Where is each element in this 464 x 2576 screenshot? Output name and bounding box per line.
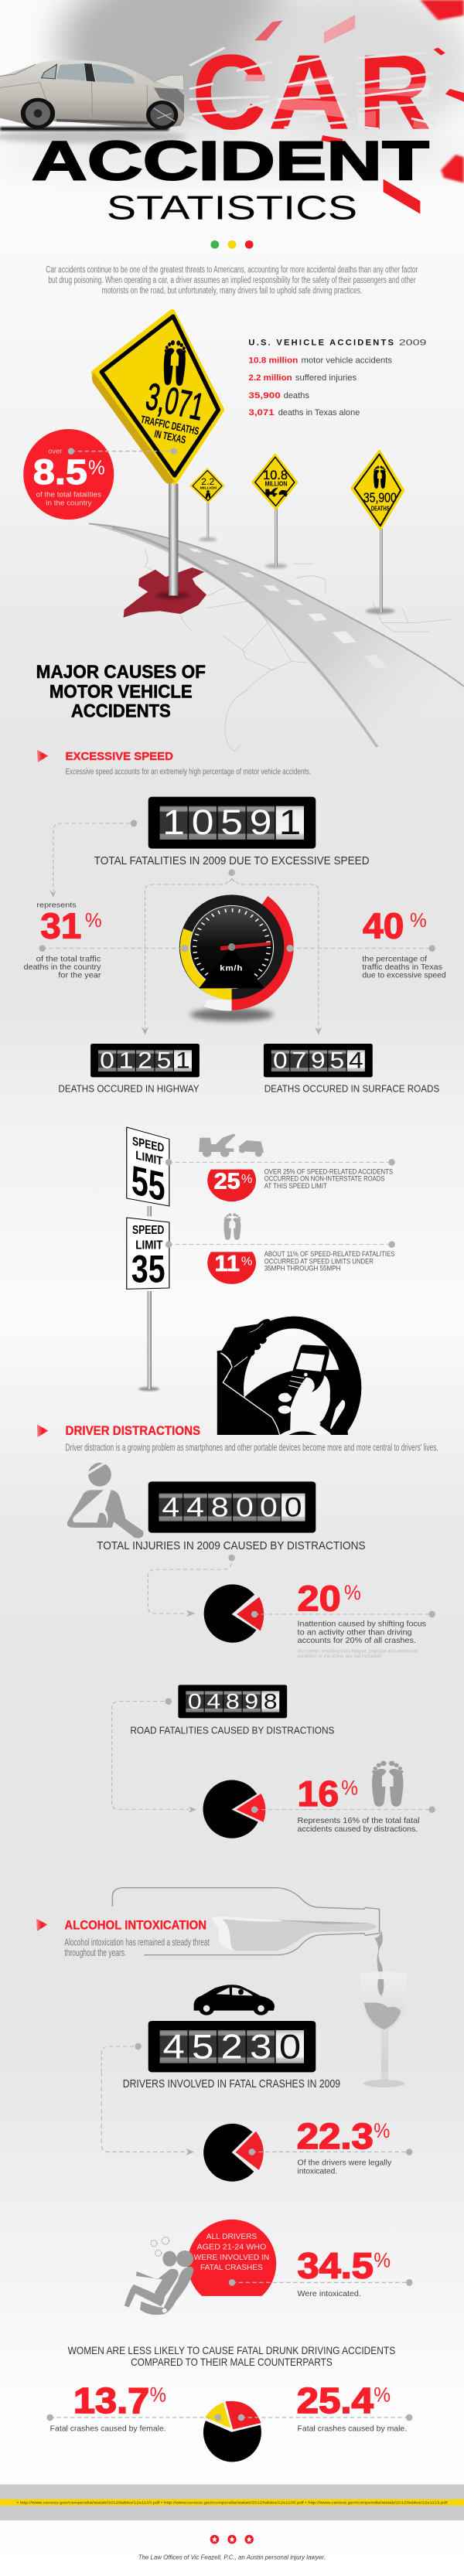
small sign: 35,900 deaths: 35,900: [363, 489, 397, 505]
counter: 10591: [148, 797, 316, 849]
U.S. vehicle accidents stats: [248, 339, 426, 417]
speed limit signs on a pole: SPEED: [132, 1224, 164, 1237]
small sign: 2.2 million: [191, 469, 223, 541]
sources band: [0, 2484, 464, 2520]
small sign: 10.8 million: MILLION: [264, 479, 288, 487]
U.S. vehicle accidents stats: U.S. VEHICLE ACCIDENTS: [248, 339, 394, 348]
counter: 07954: 0: [273, 1047, 288, 1073]
speed limit signs on a pole: 55: [131, 1157, 165, 1211]
U.S. vehicle accidents stats: 3,071: [248, 408, 275, 417]
header background haze: [0, 0, 464, 170]
counter: 10591: 1: [279, 803, 301, 842]
counter: 07954: 4: [349, 1047, 363, 1073]
counter: 45230: 0: [279, 2029, 301, 2067]
traffic light dots: [210, 240, 254, 249]
pole shadow on Texas: [157, 592, 189, 599]
icon: section arrow: [36, 1919, 47, 1931]
speed limit signs on a pole: LIMIT: [135, 1239, 162, 1252]
16 percent stat: Represents 16% of the total fatal: [298, 1817, 420, 1825]
34.5 percent stat: 34.5: [298, 2246, 374, 2286]
heading: women versus men: [68, 2345, 395, 2368]
13.7 percent stat: %: [150, 2384, 166, 2407]
20 percent stat: to an activity other than driving: [298, 1628, 412, 1637]
heading: alcohol intoxication: ALCOHOL INTOXICATION: [64, 1917, 206, 1932]
counter: 45230: 2: [220, 2029, 243, 2067]
small sign: 2.2 million: MILLION: [200, 486, 217, 490]
icon: feet: [223, 1213, 241, 1240]
25.4 percent stat: 25.4: [297, 2380, 374, 2421]
counter label: TOTAL FATALITIES IN 2009 DUE TO EXCESSIVE SPEED: [94, 855, 370, 867]
40 percent stat: 40: [363, 906, 404, 946]
icon: pouring stream: [374, 1930, 383, 1996]
alcohol description: throughout the years.: [64, 1947, 126, 1958]
25.4 percent stat: Fatal crashes caused by male.: [298, 2424, 407, 2434]
speed limit signs on a pole: SPEED: [132, 1134, 164, 1155]
heading: excessive speed: EXCESSIVE SPEED: [66, 751, 173, 763]
counter: 01251: 5: [157, 1047, 171, 1073]
pie chart: gender comparison: [203, 2401, 261, 2462]
counter: 01251: 0: [100, 1047, 114, 1073]
pie chart: 16 percent: [203, 1780, 265, 1838]
counter: 04898: 0: [188, 1690, 202, 1713]
11 percent badge: [207, 1251, 256, 1284]
small sign: 10.8 million: 10.8: [263, 468, 288, 482]
icon: injured person: [67, 1462, 144, 1538]
star badges: [210, 2535, 254, 2544]
counter: 10591: 9: [250, 803, 271, 842]
counter: 448000: 4: [162, 1492, 179, 1523]
final statistics section: [0, 2072, 464, 2561]
counter: 01251: 1: [119, 1047, 133, 1073]
22.3 percent stat: [297, 2116, 391, 2176]
counter: 07954: [264, 1044, 373, 1077]
11 percent text: 35MPH THROUGH 55MPH: [264, 1265, 340, 1273]
25 percent text: [264, 1168, 393, 1191]
sign text: [138, 376, 208, 448]
bubble: drivers aged 21-24: WERE INVOLVED IN: [194, 2254, 269, 2262]
icon: car silhouette: [194, 1985, 275, 2015]
counter: 07954: 9: [311, 1047, 326, 1073]
22.3 percent stat: 22.3: [297, 2116, 374, 2156]
callout: 8.5 percent circle: %: [88, 456, 105, 479]
U.S. vehicle accidents stats: deaths in Texas alone: [278, 408, 360, 417]
flying shards: [254, 0, 464, 214]
22.3 percent stat: intoxicated.: [298, 2167, 337, 2176]
icon: wine glass: [360, 1971, 407, 2073]
25 percent text: OVER 25% OF SPEED-RELATED ACCIDENTS: [264, 1168, 393, 1176]
title: CAR (shattered): C: [192, 33, 266, 152]
31 percent stat: %: [85, 909, 102, 932]
connector to 16 percent pie, upper part: [112, 1698, 172, 1748]
callout: 8.5 percent circle: in the country: [46, 499, 92, 508]
counter: 10591: 5: [220, 803, 243, 842]
icon: toe tag feet: [162, 340, 186, 386]
25 percent text: AT THIS SPEED LIMIT: [264, 1183, 327, 1191]
31 percent stat: for the year: [58, 972, 101, 980]
31 percent stat: deaths in the country: [24, 964, 101, 972]
speedometer gauge: km/h: [220, 964, 242, 973]
11 percent badge: %: [241, 1254, 252, 1268]
counter label: DRIVERS INVOLVED IN FATAL CRASHES IN 2009: [123, 2077, 340, 2090]
bubble: drivers aged 21-24: [187, 2220, 276, 2296]
title: CAR (shattered): A: [268, 33, 350, 152]
heading: major causes: MAJOR CAUSES OF: [36, 662, 206, 683]
counter: 45230: 5: [192, 2029, 213, 2067]
16 percent stat: accidents caused by distractions.: [298, 1825, 418, 1834]
40 percent stat: due to excessive speed: [362, 972, 446, 980]
excessive speed section: [24, 797, 446, 1095]
connector to 22.3 percent pie, upper part: [101, 2043, 142, 2073]
40 percent stat: traffic deaths in Texas: [362, 964, 442, 972]
22.3 percent stat: %: [374, 2120, 390, 2142]
title: CAR (shattered): [189, 33, 435, 152]
counter: 01251: 1: [176, 1047, 190, 1073]
counter: 01251: [90, 1044, 200, 1077]
intro text: [46, 264, 418, 295]
31 percent stat: of the total traffic: [36, 956, 101, 963]
counter: 448000: 8: [211, 1492, 229, 1523]
connector 22.3 percent: [248, 2148, 412, 2155]
counter: 448000: 0: [285, 1492, 302, 1523]
22.3 percent stat: Of the drivers were legally: [298, 2159, 391, 2168]
callout: 8.5 percent circle: of the total fatalities: [36, 491, 101, 499]
13.7 percent stat: 13.7: [73, 2380, 149, 2421]
counter label: TOTAL INJURIES IN 2009 CAUSED BY DISTRACTIONS: [97, 1540, 366, 1552]
connector 20 percent: [251, 1611, 435, 1617]
11 percent text: ABOUT 11% OF SPEED-RELATED FATALITIES: [264, 1251, 394, 1259]
counter: 448000: [148, 1481, 316, 1533]
sign text: 3,071: [142, 376, 207, 428]
small sign: 35,900 deaths: [352, 451, 404, 614]
U.S. vehicle accidents stats: 2.2 million: [248, 373, 292, 383]
excessive speed description: Excessive speed accounts for an extremely high percentage of motor vehicle accidents.: [66, 768, 311, 777]
20 percent stat: condition of the driver are not included): [298, 1654, 382, 1659]
counter: 448000: 0: [260, 1492, 278, 1523]
connector 55: [165, 1159, 395, 1166]
callout: 8.5 percent circle: 8.5: [33, 452, 87, 492]
connector to pie: [148, 1555, 235, 1617]
16 percent stat: [298, 1774, 420, 1834]
connector 35: [165, 1241, 395, 1248]
11 percent badge: 11: [214, 1251, 240, 1276]
counter label: ROAD FATALITIES CAUSED BY DISTRACTIONS: [130, 1725, 334, 1736]
sign text: IN TEXAS: [153, 428, 187, 446]
counter: 45230: [148, 2021, 316, 2072]
heading: major causes: ACCIDENTS: [71, 700, 171, 721]
25.4 percent stat: %: [374, 2384, 391, 2407]
31 percent stat: 31: [40, 906, 81, 946]
connector gender: [46, 2414, 412, 2421]
icon: feet: [372, 1761, 403, 1807]
callout: 8.5 percent circle: [23, 429, 114, 520]
heading: major causes: [36, 662, 206, 721]
label: highway: DEATHS OCCURED IN HIGHWAY: [58, 1084, 200, 1095]
alcohol section: [36, 1747, 435, 2073]
speed limit section: [125, 1125, 395, 1391]
small sign: 10.8 million: [253, 455, 297, 568]
20 percent stat: [298, 1579, 426, 1659]
20 percent stat: (Accidents resulting from fatigue, physical and emotional: [298, 1649, 418, 1654]
big Texas sign: [92, 312, 221, 595]
connector to 31 percent: [49, 820, 137, 898]
25 percent badge: 25: [214, 1168, 241, 1194]
counter: 04898: 4: [206, 1690, 220, 1713]
title: STATISTICS: STATISTICS: [107, 188, 357, 227]
alcohol description: [64, 1937, 210, 1958]
title: ACCIDENT: ACCIDENT: [32, 130, 429, 192]
sign text: TRAFFIC DEATHS: [140, 414, 200, 437]
Texas map highlight: [124, 567, 206, 618]
bubble: drivers aged 21-24: AGED 21-24 WHO: [196, 2243, 267, 2252]
counter: 07954: 5: [329, 1047, 344, 1073]
20 percent stat: 20: [298, 1579, 341, 1619]
counter: 448000: 0: [236, 1492, 254, 1523]
counter: 04898: 8: [264, 1690, 278, 1713]
heading: major causes: MOTOR VEHICLE: [49, 681, 193, 702]
counter: 04898: 8: [226, 1690, 240, 1713]
counter: 10591: 1: [162, 803, 185, 842]
callout: 8.5 percent circle: over: [48, 448, 62, 455]
U.S. vehicle accidents stats: 2009: [399, 339, 426, 348]
footer credit: The Law Offices of Vic Feazell, P.C., an Austin personal injury lawyer.: [138, 2554, 326, 2561]
header section: [0, 0, 464, 295]
speed limit signs on a pole: [125, 1125, 170, 1391]
road signs and US map section: [23, 312, 464, 777]
U.S. vehicle accidents stats: motor vehicle accidents: [302, 356, 392, 366]
20 percent stat: accounts for 20% of all crashes.: [298, 1637, 416, 1645]
driver distractions section: [37, 1423, 438, 1748]
icon: hands on steering wheel with phone: [217, 1316, 362, 1435]
heading: women versus men: COMPARED TO THEIR MALE COUNTERPARTS: [131, 2356, 333, 2368]
25 percent badge: %: [241, 1171, 252, 1186]
connector from circle to sign: [68, 448, 177, 455]
crashed car photo: [0, 60, 186, 143]
connector to small counters: [142, 869, 322, 1035]
alcohol description: Alocohol intoxication has remained a steady threat: [64, 1937, 210, 1947]
icon: section arrow: [37, 750, 48, 762]
wine glass base: [363, 2072, 404, 2087]
horizontal connector: [39, 945, 435, 952]
31 percent stat: represents: [36, 901, 77, 909]
small sign: 35,900 deaths: DEATHS: [371, 505, 390, 513]
speed limit signs on a pole: 35: [131, 1248, 165, 1291]
icon: tow truck: [199, 1133, 264, 1157]
counter: 10591: 0: [192, 803, 213, 842]
speed limit signs on a pole: LIMIT: [135, 1148, 163, 1168]
speedometer gauge: [179, 894, 294, 1021]
16 percent stat: %: [341, 1777, 358, 1800]
25.4 percent stat: [297, 2380, 407, 2434]
bubble: drivers aged 21-24: FATAL CRASHES: [200, 2264, 263, 2272]
U.S. vehicle accidents stats: 35,900: [248, 391, 281, 400]
13.7 percent stat: Fatal crashes caused by female.: [50, 2424, 166, 2434]
31 percent stat: [24, 901, 102, 980]
connector 34.5 percent: [229, 2279, 412, 2286]
40 percent stat: the percentage of: [362, 956, 427, 963]
connector to 16 percent pie, lower part: [112, 1747, 196, 1813]
34.5 percent stat: [298, 2246, 391, 2298]
pie chart: 22.3 percent: [203, 2124, 264, 2182]
20 percent stat: Inattention caused by shifting focus: [298, 1620, 426, 1628]
connector 16 percent: [251, 1806, 435, 1813]
25 percent text: OCCURRED ON NON-INTERSTATE ROADS: [264, 1175, 384, 1183]
icon: section arrow: [37, 1424, 48, 1437]
counter: 45230: 3: [250, 2029, 271, 2067]
icon: driver thrown back in seat: [125, 2237, 193, 2315]
U.S. vehicle accidents stats: 10.8 million: [248, 356, 299, 366]
40 percent stat: %: [410, 909, 427, 932]
20 percent stat: %: [344, 1582, 361, 1605]
heading: women versus men: WOMEN ARE LESS LIKELY TO CAUSE FATAL DRUNK DRIVING ACCIDENTS: [68, 2345, 395, 2356]
16 percent stat: 16: [298, 1774, 339, 1814]
25 percent badge: [207, 1168, 256, 1201]
counter: 07954: 7: [292, 1047, 306, 1073]
13.7 percent stat: [50, 2380, 166, 2434]
small sign: 2.2 million: 2.2: [201, 476, 215, 487]
counter: 45230: 4: [162, 2029, 185, 2067]
map outline: [145, 549, 452, 751]
icon: pouring bottle: [112, 1888, 380, 1955]
road: [89, 523, 464, 750]
heading: driver distractions: DRIVER DISTRACTIONS: [66, 1423, 200, 1438]
pie chart: 20 percent: [204, 1584, 264, 1643]
counter: 04898: [178, 1685, 287, 1718]
sources band: • http://www.census.gov/compendia/statab/2012/tables/12s1103.pdf • http://www.census.gov/compendia/statab/2012/tables/12s1106.pdf • http://www.census.gov/compendia/statab/2012/tables/12s1113.pdf: [17, 2500, 448, 2506]
U.S. vehicle accidents stats: suffered injuries: [295, 373, 357, 383]
counter: 01251: 2: [138, 1047, 152, 1073]
counter: 04898: 9: [244, 1690, 258, 1713]
U.S. vehicle accidents stats: deaths: [284, 391, 309, 400]
connector to 22.3 percent pie, lower part: [101, 2072, 194, 2155]
11 percent text: [264, 1251, 394, 1273]
bubble: drivers aged 21-24: ALL DRIVERS: [206, 2232, 257, 2241]
34.5 percent stat: %: [374, 2250, 391, 2272]
counter: 448000: 4: [186, 1492, 204, 1523]
34.5 percent stat: Were intoxicated.: [298, 2290, 361, 2298]
40 percent stat: [362, 906, 446, 980]
11 percent text: OCCURRED AT SPEED LIMITS UNDER: [264, 1258, 374, 1266]
title: CAR (shattered): R: [358, 33, 432, 152]
